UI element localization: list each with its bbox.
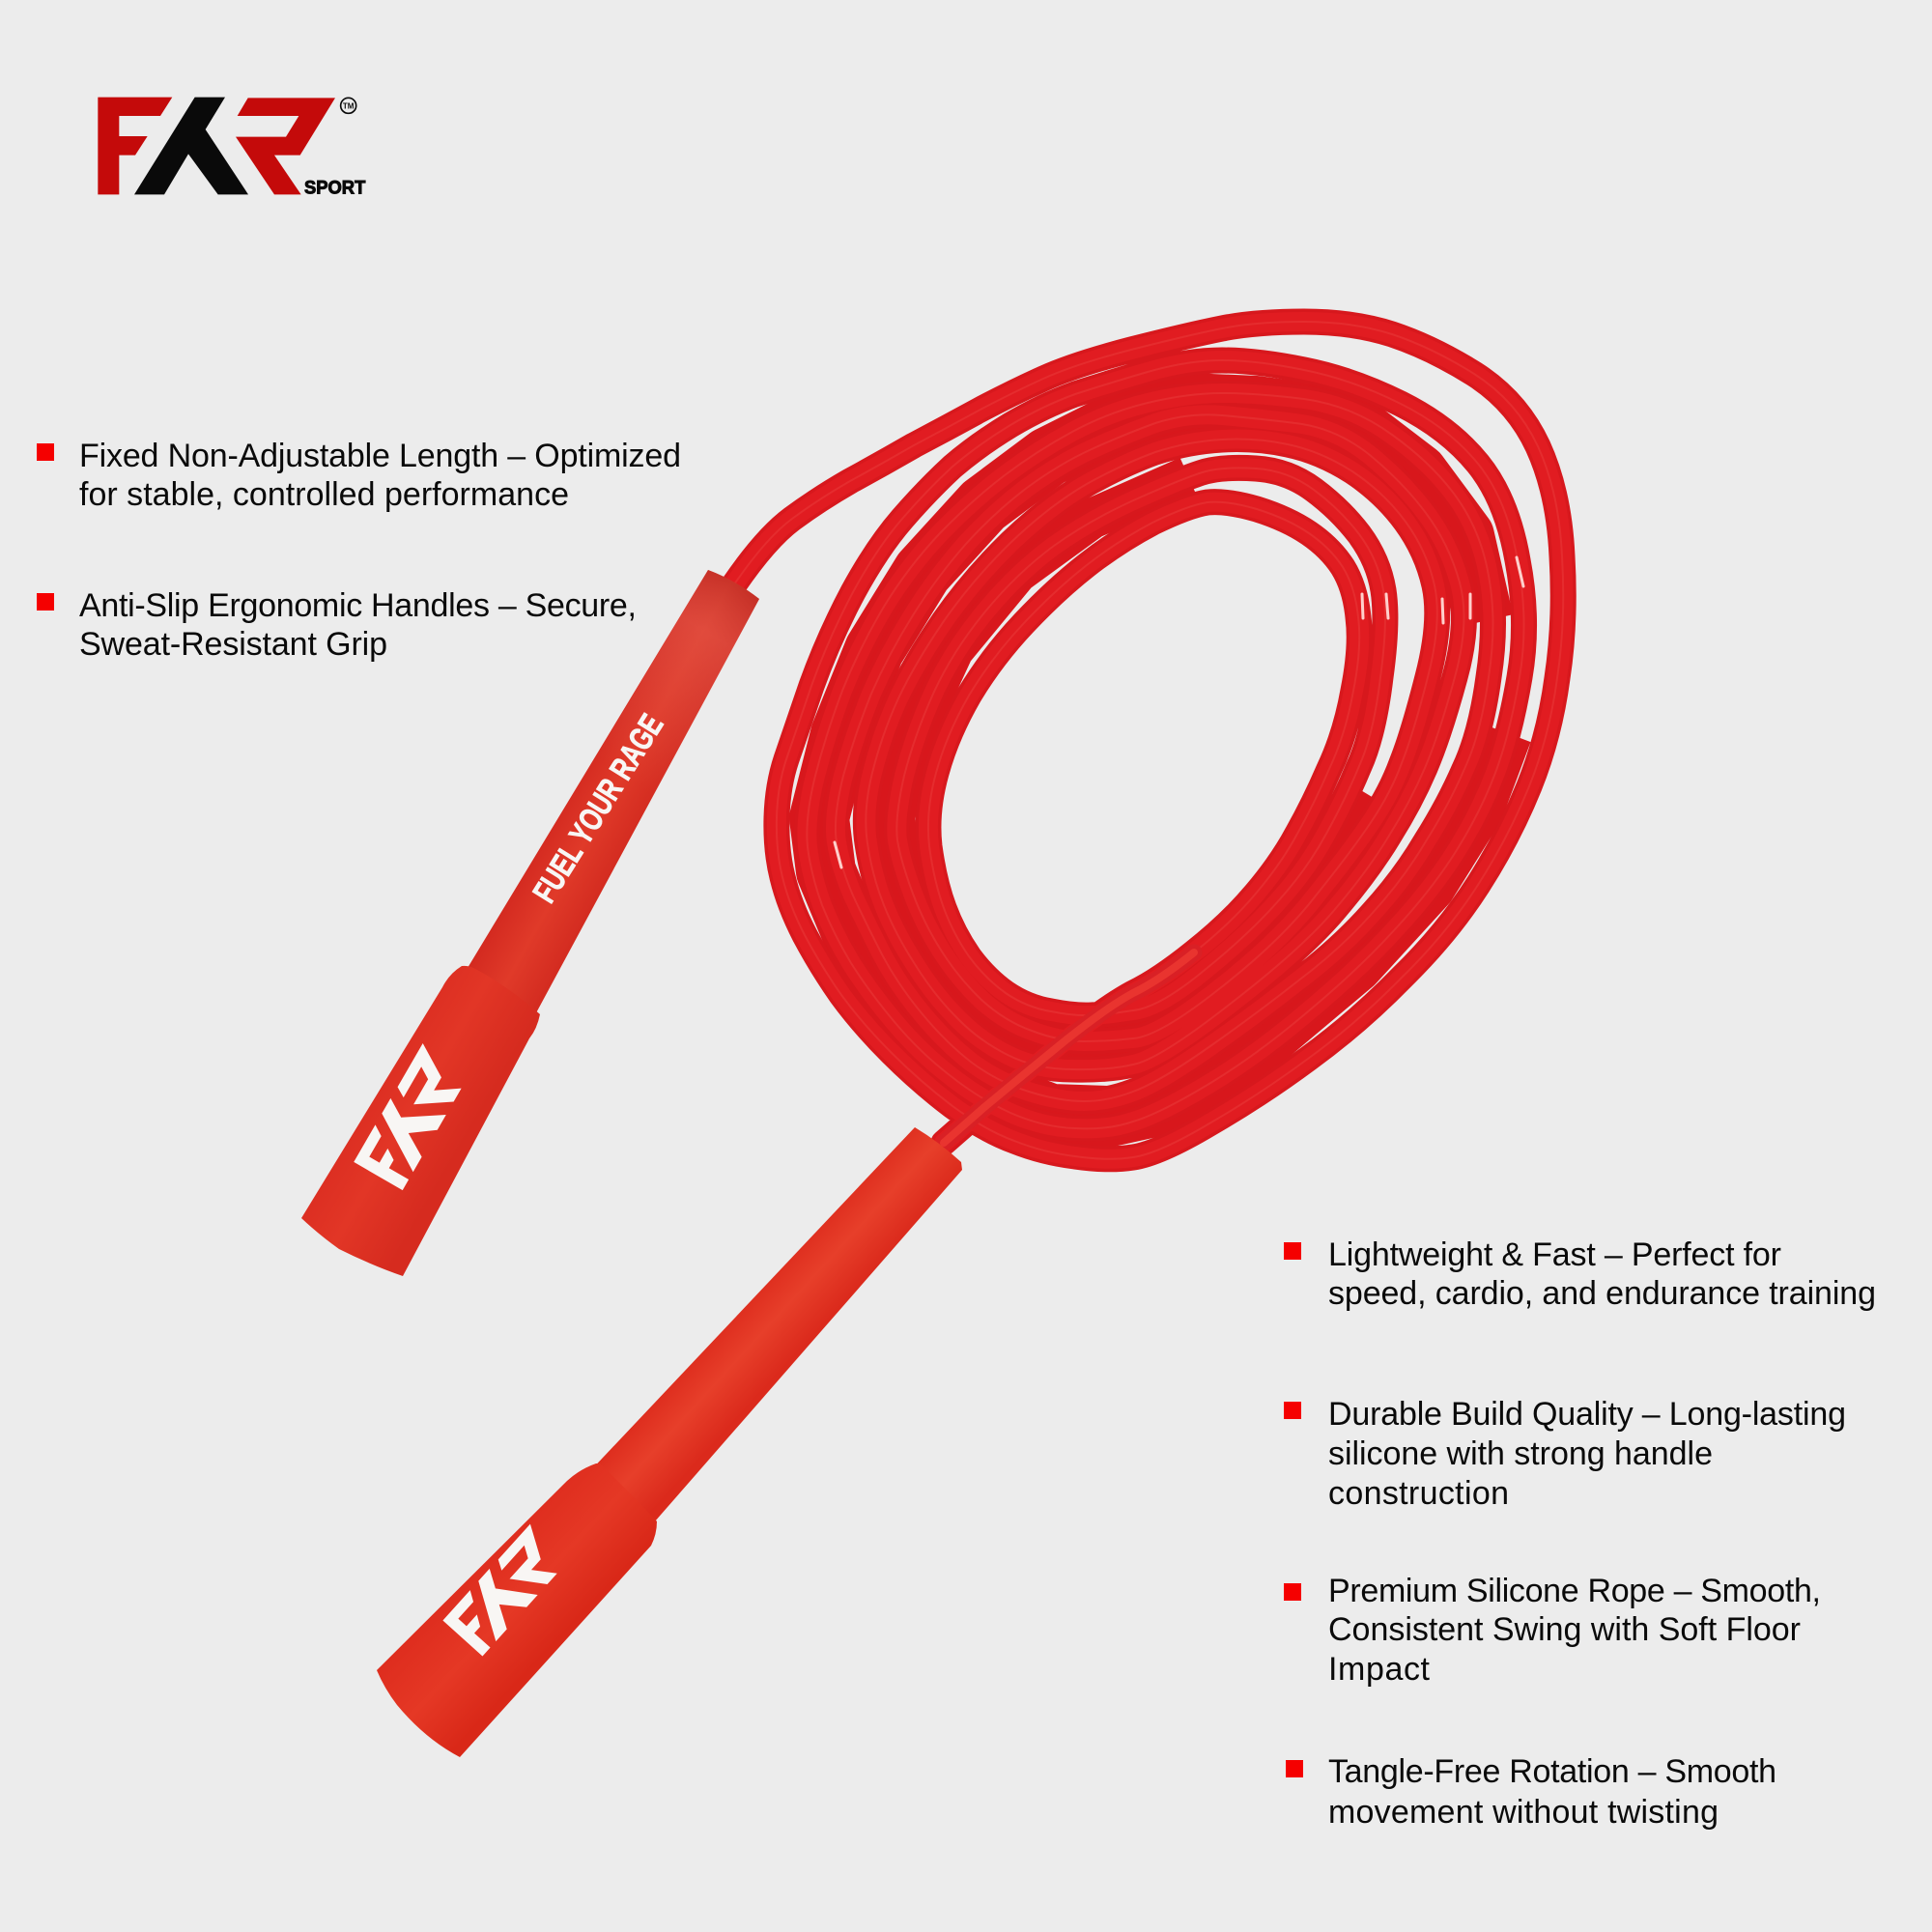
feature: silicone rope: [1284, 1573, 1821, 1688]
rope coil: [734, 322, 1563, 1159]
lower handle: [377, 1127, 962, 1757]
feature: tangle-free: movement without twisting: [1328, 1794, 1719, 1831]
feature: silicone rope: Premium Silicone Rope – Smooth,: [1328, 1573, 1821, 1609]
feature: tangle-free: [1286, 1753, 1776, 1831]
feature: silicone rope: Impact: [1328, 1651, 1431, 1688]
feature: tangle-free: Tangle-Free Rotation – Smooth: [1328, 1753, 1776, 1790]
feature: lightweight: speed, cardio, and endurance training: [1328, 1275, 1876, 1312]
lower handle logo: [442, 1523, 570, 1657]
upper handle: [301, 570, 759, 1276]
feature: fixed length: [37, 438, 681, 513]
feature: fixed length: Fixed Non-Adjustable Length – Optimized: [79, 438, 681, 474]
logo: FKR Sport: TM: [343, 101, 355, 110]
feature: silicone rope: Consistent Swing with Soft Floor: [1328, 1611, 1801, 1648]
upper handle slogan: FUEL YOUR RAGE: [526, 708, 670, 909]
feature: fixed length: for stable, controlled performance: [79, 476, 569, 513]
feature: lightweight: Lightweight & Fast – Perfect for: [1328, 1236, 1781, 1273]
logo: FKR Sport: SPORT: [304, 177, 365, 198]
feature: handles: Anti-Slip Ergonomic Handles – Secure,: [79, 587, 637, 624]
feature: handles: Sweat-Resistant Grip: [79, 626, 387, 663]
feature: durable: Durable Build Quality – Long-lasting: [1328, 1396, 1846, 1433]
upper handle logo: [354, 1043, 471, 1190]
feature: durable: construction: [1328, 1475, 1509, 1512]
feature: durable: [1284, 1396, 1846, 1512]
logo: FKR Sport: [98, 98, 365, 198]
feature: lightweight: [1284, 1236, 1876, 1312]
feature: durable: silicone with strong handle: [1328, 1435, 1713, 1472]
feature: handles: [37, 587, 637, 663]
